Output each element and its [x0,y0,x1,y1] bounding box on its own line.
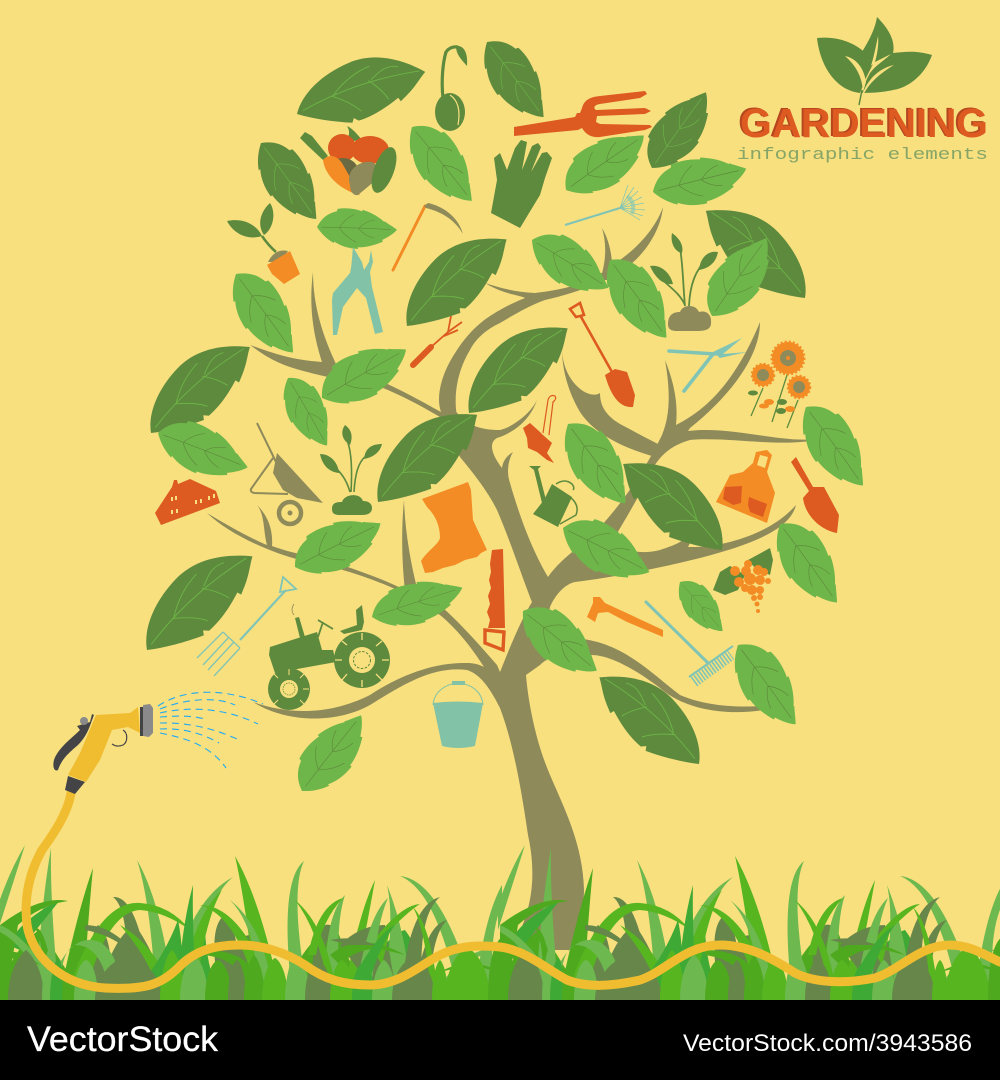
title: GARDENING [738,99,986,145]
icon: plant with green mound [320,425,382,515]
icon: glove [491,140,552,228]
leaf dark lower right [583,653,720,783]
watermark logo text: VectorStock [27,1020,219,1059]
leaf light 15 [548,410,645,518]
watermark band [0,1000,1000,1080]
water spray [158,692,263,768]
leaf dark centre [449,305,584,432]
leaf light 19 [508,593,611,689]
leaf light 14 [693,225,786,330]
leaf light 7 [285,503,391,588]
leaf dark centre top [386,215,523,345]
grass blades left [0,845,502,990]
garden hose [26,793,1000,988]
icon: fan rake [565,185,645,225]
leaf dark trunk [357,391,494,521]
leaf dark top [287,41,433,138]
icon: plant with brown mound [650,233,718,331]
icon: seed sprout [435,46,467,131]
leaf light 17 [552,507,660,594]
leaf light 18 [760,510,856,617]
grass base left [0,935,505,1000]
icon: pitchfork [197,577,296,676]
icon: spray gun nozzle [53,704,153,794]
subtitle: infographic elements [737,146,988,165]
icon: seedling in pot [227,203,300,284]
icon: bucket [433,681,483,748]
icon: rake [646,602,733,682]
leaf light 21 [718,631,815,739]
icon: tractor [268,604,390,710]
icon: axe [587,597,663,637]
light leaves [149,113,882,806]
grass blades right [498,845,1000,990]
leaf light 20 [668,572,734,642]
leaf dark serrated 1 [468,28,562,131]
icon: sickle [393,203,463,270]
icon: pruning shears [332,247,383,335]
leaf dark left [130,323,266,452]
leaf light 12 [520,222,620,307]
icon: sunflowers [748,342,810,428]
icon: wheelbarrow [251,423,323,524]
leaf light 6 [149,411,256,490]
icon: small red garden tool [523,396,556,463]
leaf light 9 [284,701,380,806]
leaf dark serrated 2 [242,130,335,233]
leaf light 3 [216,260,312,367]
leaf light 2 [316,207,398,250]
leaf dark lower left [124,531,270,670]
leaf light 5 [271,369,343,455]
leaf light 1 [394,113,490,216]
icon: apron [716,450,775,523]
icon: vegetables [300,126,402,196]
icon: trowel [791,457,839,533]
tree trunk and branches [207,207,826,950]
dark leaves [124,28,826,783]
icon: small cultivator [413,316,462,365]
icon: hand saw [485,549,505,650]
watermark url text: VectorStock.com/3943586 [683,1030,972,1057]
icon: grapes [713,548,773,613]
grass base right [498,935,1000,1000]
logo leaves [817,17,932,105]
leaf light 8 [366,568,469,637]
leaf light 16 [786,393,882,500]
leaf light 4 [310,329,418,419]
leaf light 11 [647,146,752,215]
leaf dark serrated 3 [634,79,725,181]
grass [0,845,1000,1000]
icon: shovel [570,303,635,407]
leaf light 10 [553,117,657,209]
leaf dark right top [689,187,826,317]
icon: barn [155,479,220,525]
icon: rubber boot [421,482,487,573]
leaf dark right mid [607,440,743,569]
icon: hedge shears [669,338,747,391]
title: GARDENING [740,100,988,146]
icon: watering can [529,466,577,527]
icon: hand fork [514,91,652,137]
leaf light 13 [591,246,685,352]
